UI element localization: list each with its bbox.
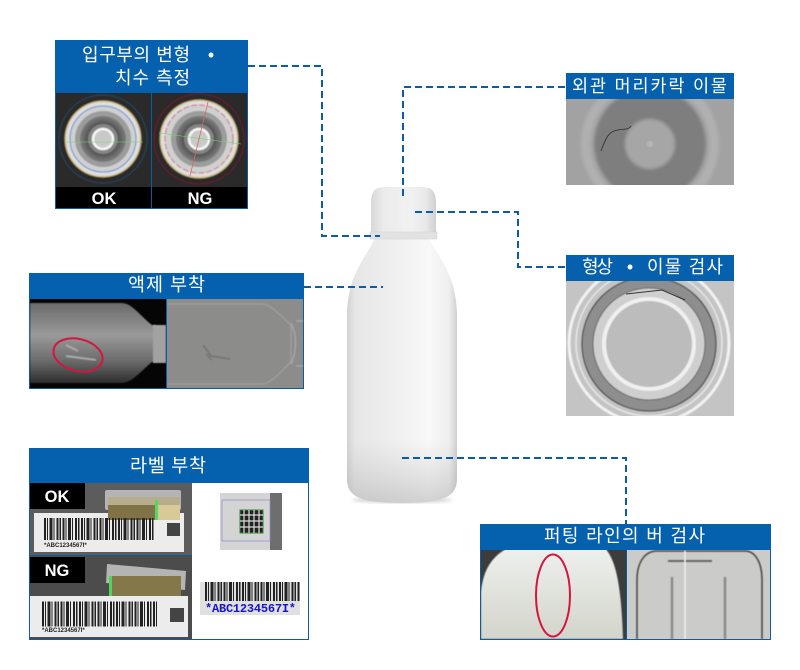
QR code image [220, 493, 282, 550]
panel: shape and foreign matter inspection [566, 255, 734, 423]
connector: parting line [402, 458, 626, 524]
OK tag: OK [45, 488, 69, 506]
NG label: NG [188, 190, 212, 208]
bottle photo [481, 548, 626, 639]
NG tag: NG [45, 562, 69, 580]
heading: 이물 검사 [647, 257, 723, 277]
shape image [566, 281, 734, 416]
heading: 형상 [582, 257, 613, 277]
bottle base shading [347, 440, 457, 503]
NG label image [30, 556, 192, 639]
bottle body [347, 238, 457, 503]
OK label image: *ABC1234567I* [44, 543, 87, 549]
heading: 액제 부착 [128, 274, 205, 295]
OK tag [30, 483, 85, 509]
hair image [566, 99, 734, 185]
bottle [347, 187, 457, 503]
bottle cap [371, 187, 436, 232]
barcode read image: *ABC1234567I* [205, 602, 296, 616]
NG image [152, 93, 247, 187]
filtered image [627, 550, 770, 639]
OK label image [30, 483, 192, 555]
heading [29, 273, 304, 299]
connector: liquid adhesion [304, 286, 383, 288]
NG tag [30, 557, 85, 583]
heading: 퍼팅 라인의 버 검사 [544, 526, 705, 546]
panel: label adhesion [29, 448, 309, 640]
heading: 입구부의 변형 [82, 45, 190, 65]
NG label image: *ABC1234567I* [42, 628, 85, 634]
panel: parting line burr inspection [480, 524, 771, 640]
liquid filtered image [167, 299, 303, 388]
heading: 치수 측정 [115, 68, 190, 88]
liquid X-ray image [30, 299, 166, 388]
bottle neck ring [370, 232, 437, 239]
heading [55, 40, 248, 93]
QR code [167, 523, 180, 536]
heading [480, 524, 771, 550]
heading: 라벨 부착 [130, 455, 206, 476]
red ellipse [536, 554, 570, 636]
bottle shadow [352, 497, 452, 503]
heading [566, 255, 734, 281]
barcode read image [200, 582, 300, 616]
connector: mouth deformation [248, 66, 380, 236]
heading [29, 448, 309, 483]
OK image [56, 93, 151, 187]
OK label: OK [92, 190, 116, 208]
barcode [42, 602, 158, 626]
QR code [170, 608, 184, 622]
connector: hair contamination [403, 87, 566, 196]
panel: hair contamination on exterior [566, 73, 734, 185]
NG label [152, 187, 247, 208]
heading: • [208, 45, 214, 65]
connector: shape inspection [415, 212, 566, 267]
heading: • [627, 257, 633, 277]
panel: mouth deformation and dimension measurement [55, 40, 248, 208]
red ellipse [50, 333, 106, 377]
barcode [44, 518, 155, 540]
OK label [56, 187, 151, 208]
heading: 외관 머리카락 이물 [572, 76, 727, 96]
panel: liquid adhesion [29, 273, 304, 389]
